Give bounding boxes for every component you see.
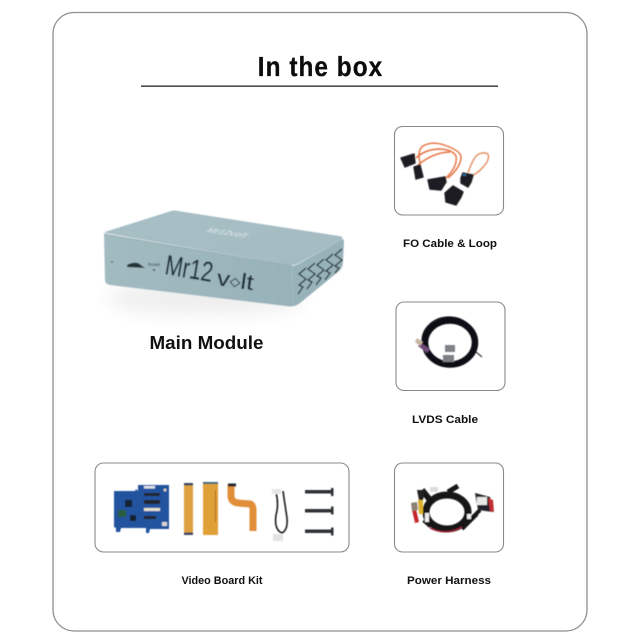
brand lettering: lt — [239, 269, 255, 295]
black connectors — [401, 154, 473, 205]
orange fibre cables — [416, 143, 488, 178]
ribbon cable one — [184, 483, 193, 535]
RCA plugs — [418, 499, 423, 514]
title: In the box — [258, 50, 383, 82]
brand lettering — [163, 249, 255, 295]
small white connectors — [430, 487, 438, 492]
cable labels — [445, 345, 455, 352]
label: main module: Main Module — [150, 333, 264, 353]
label: power harness: Power Harness — [407, 575, 491, 587]
brand lettering: v — [215, 265, 230, 291]
ribbon cable two — [203, 482, 218, 535]
label: LVDS cable: LVDS Cable — [412, 414, 478, 426]
port details — [111, 261, 161, 271]
three screws — [305, 488, 334, 536]
small wire harness — [272, 489, 287, 541]
ribbon cable three — [228, 484, 253, 531]
label: FO cable and loop: FO Cable & Loop — [403, 238, 497, 250]
purple connector — [418, 343, 430, 353]
brand lettering: Mr12 — [163, 249, 215, 288]
main module device — [104, 210, 344, 314]
black cable coil — [422, 317, 482, 365]
brand lettering: ◇ — [229, 274, 242, 289]
white and black plug — [475, 493, 493, 512]
panel: LVDS cable — [396, 302, 505, 390]
label: video board kit: Video Board Kit — [182, 575, 263, 587]
black harness loop — [422, 486, 480, 532]
blue circuit board — [114, 485, 169, 533]
side vents — [298, 249, 342, 294]
device top face — [105, 210, 343, 265]
panel: power harness — [394, 463, 504, 552]
device front face — [104, 234, 293, 306]
device side face — [292, 239, 344, 306]
top logo: Mr12volt — [203, 227, 251, 239]
port details: Reset — [148, 262, 161, 267]
panel: video board kit — [95, 463, 349, 552]
panel: FO cable and loop — [394, 126, 504, 215]
